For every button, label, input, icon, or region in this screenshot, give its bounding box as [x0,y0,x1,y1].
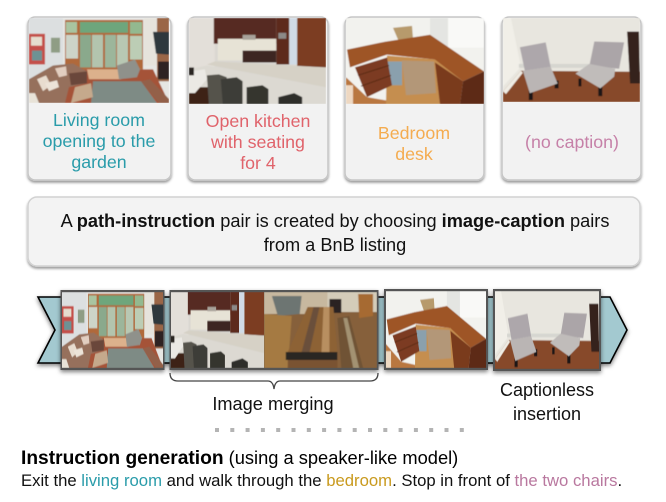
caption: bedroom desk: Bedroom [378,123,450,143]
text block: generated instruction: Exit the living room and walk through the bedroom. Stop in front of the two chairs. [21,471,622,490]
caption: open kitchen: with seating [210,132,305,152]
heading: instruction generation: Instruction generation (using a speaker-like model) [21,447,458,469]
card: no caption [502,17,641,180]
photo: desk in path [384,289,488,370]
caption: living room: Living room [53,110,145,130]
card: bedroom desk [345,17,484,180]
photo: desk [346,18,484,104]
panel: image-caption cards [28,17,641,180]
photo: kitchen [189,18,326,104]
bracket: image merging [170,373,378,389]
text block: path-instruction explanation: from a BnB listing [264,235,406,255]
ribbon arrow [38,297,627,363]
caption: open kitchen: Open kitchen [206,111,310,131]
label: captionless insertion: Captionless [500,380,594,400]
photo: living room [29,18,169,103]
caption: no caption: (no caption) [525,132,619,152]
caption: living room: garden [71,152,127,172]
photo: living room in path [60,290,164,370]
card: open kitchen [188,17,328,180]
label: captionless insertion: insertion [513,404,581,424]
panel: path strip [38,289,627,371]
photo: chairs in path [493,289,601,371]
text block: path-instruction explanation [28,197,640,266]
caption: open kitchen: for 4 [240,153,276,173]
caption: bedroom desk: desk [395,144,433,164]
label: image merging: Image merging [212,394,334,414]
photo: merged kitchen and dining [170,290,378,370]
photo: chairs [503,18,640,102]
caption: living room: opening to the [43,131,155,151]
card: living room [28,17,171,180]
text block: path-instruction explanation: A path-instruction pair is created by choosing image-caption pairs [61,211,609,231]
